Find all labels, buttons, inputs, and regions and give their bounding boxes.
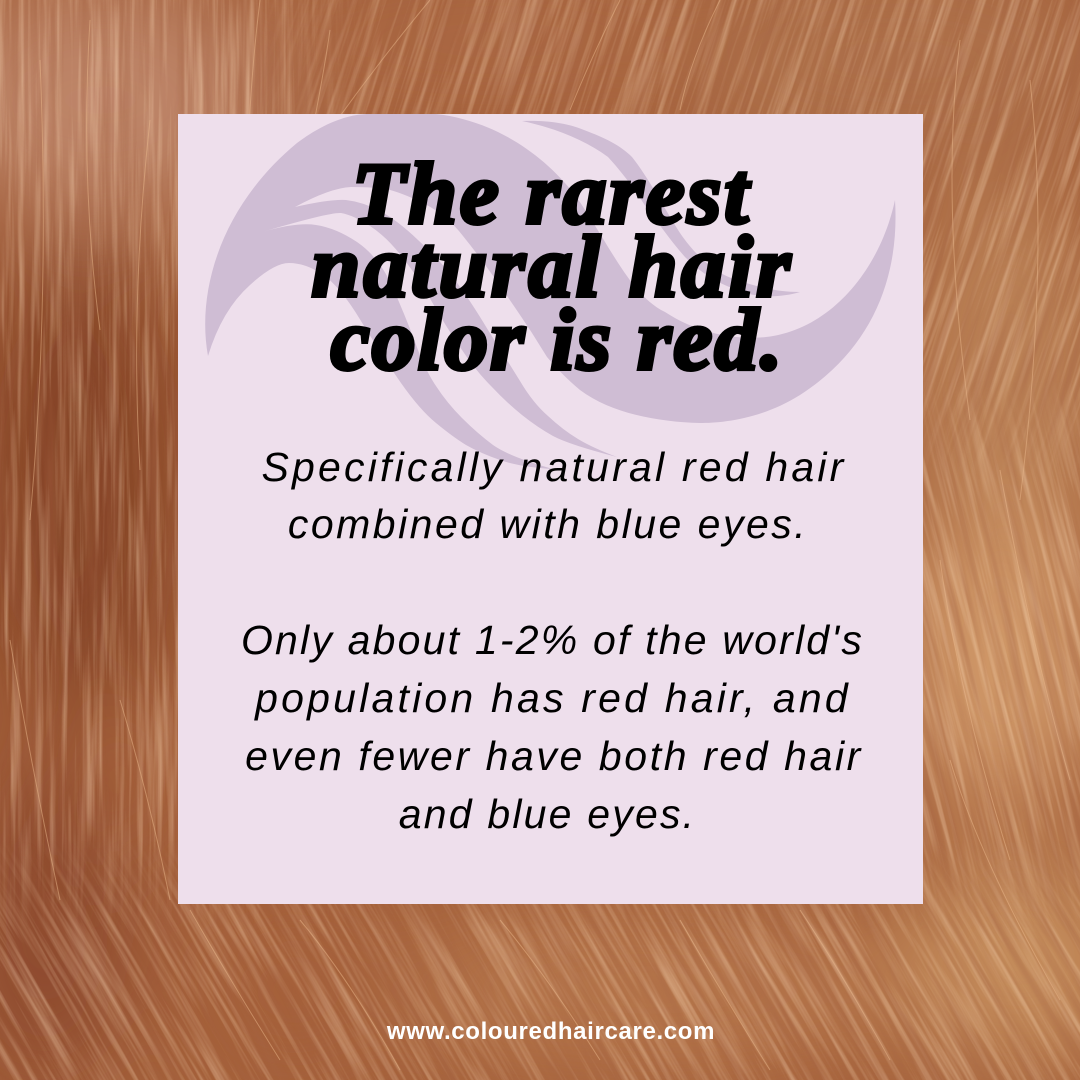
text block: red hair with blue eyes: Specifically natural red hair (261, 444, 847, 490)
text block: population statistic: even fewer have both red hair (245, 733, 863, 779)
website url: www.colouredhaircare.com (387, 1018, 715, 1045)
text block: population statistic: and blue eyes. (399, 791, 696, 837)
text block: population statistic: population has red hair, and (255, 675, 851, 721)
icon: hair swoosh watermark (205, 114, 896, 469)
text block: population statistic (241, 617, 864, 837)
title: natural hair (311, 219, 794, 316)
panel: lilac fact card (178, 114, 923, 904)
text block: population statistic: Only about 1-2% of the world's (241, 617, 864, 663)
title: color is red. (331, 292, 784, 389)
text block: red hair with blue eyes: combined with blue eyes. (288, 501, 808, 547)
title: The rarest (352, 146, 751, 243)
text block: red hair with blue eyes (261, 444, 847, 547)
title (310, 146, 794, 389)
